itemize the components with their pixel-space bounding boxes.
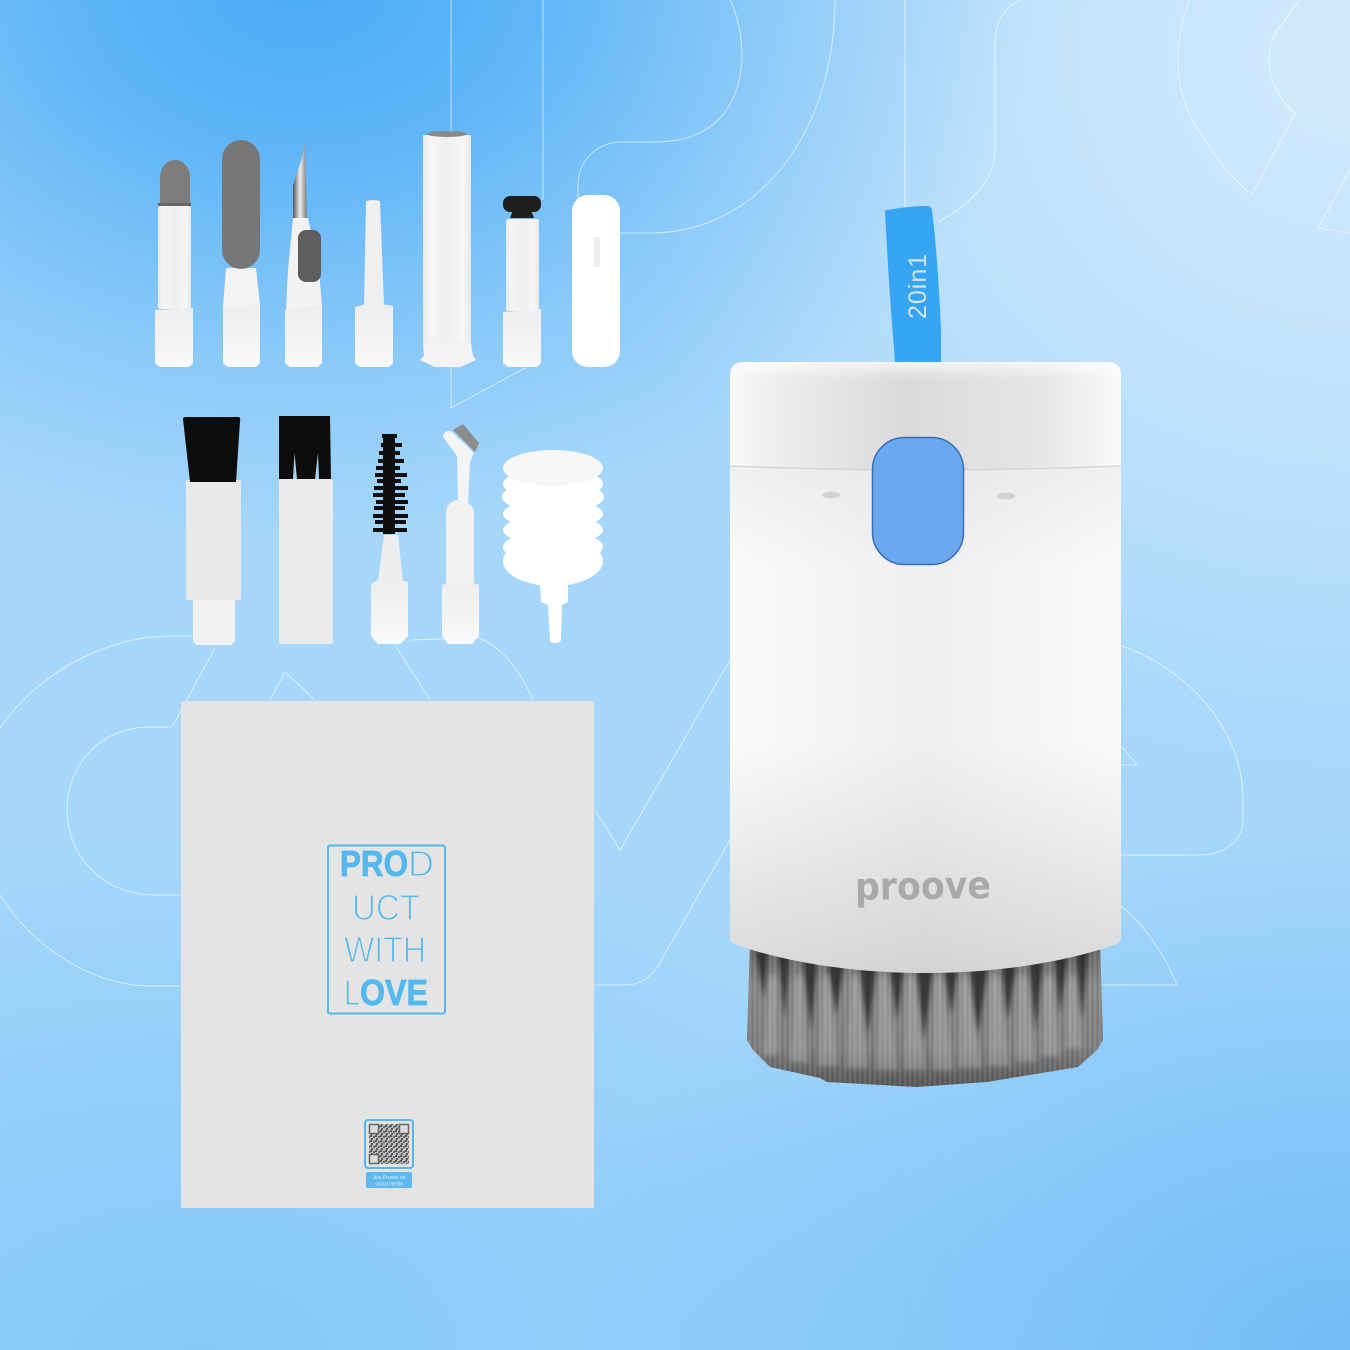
tool: foam tip: [222, 140, 260, 367]
tool: metal pick with pad: [285, 140, 322, 367]
tool: angled mini brush: [442, 424, 479, 644]
booklet slogan: WITH: [344, 929, 426, 970]
tool: long hex cap: [420, 131, 476, 367]
booklet slogan: UCT: [352, 887, 420, 928]
brush bristles: [747, 949, 1103, 1087]
proove logo: proove: [855, 863, 991, 909]
QR caption: [366, 1172, 412, 1188]
cleaning device: [730, 206, 1121, 1090]
booklet frame: [328, 846, 445, 1014]
blue button: [872, 438, 964, 564]
tool: spiral brush: [371, 434, 408, 644]
tool: white bellows blower: [502, 450, 604, 643]
booklet slogan: [340, 843, 434, 1013]
booklet slogan: OVE: [360, 972, 428, 1013]
booklet slogan: D: [408, 843, 434, 884]
tool: white cylinder: [572, 195, 620, 367]
tool: tufted black brush: [279, 416, 333, 644]
booklet slogan: L: [344, 972, 360, 1013]
QR caption: social media: [375, 1182, 403, 1188]
tool: flat black brush: [183, 417, 241, 645]
tool: tapered tip: [355, 200, 393, 367]
tool: black tip: [503, 196, 541, 367]
accessory row 2: [183, 416, 604, 645]
instruction booklet: [181, 701, 594, 1208]
cylinder body: [730, 362, 1121, 973]
tool: round brush: [155, 160, 193, 367]
background line art: [0, 0, 1350, 986]
blue strap: 20in1: [904, 253, 932, 319]
blue strap: [885, 206, 941, 362]
QR code: [365, 1120, 413, 1168]
accessory row 1: [155, 131, 620, 367]
booklet slogan: PRO: [340, 843, 408, 884]
cylinder lid: [730, 362, 1121, 470]
QR caption: Join Proove on: [372, 1175, 406, 1181]
